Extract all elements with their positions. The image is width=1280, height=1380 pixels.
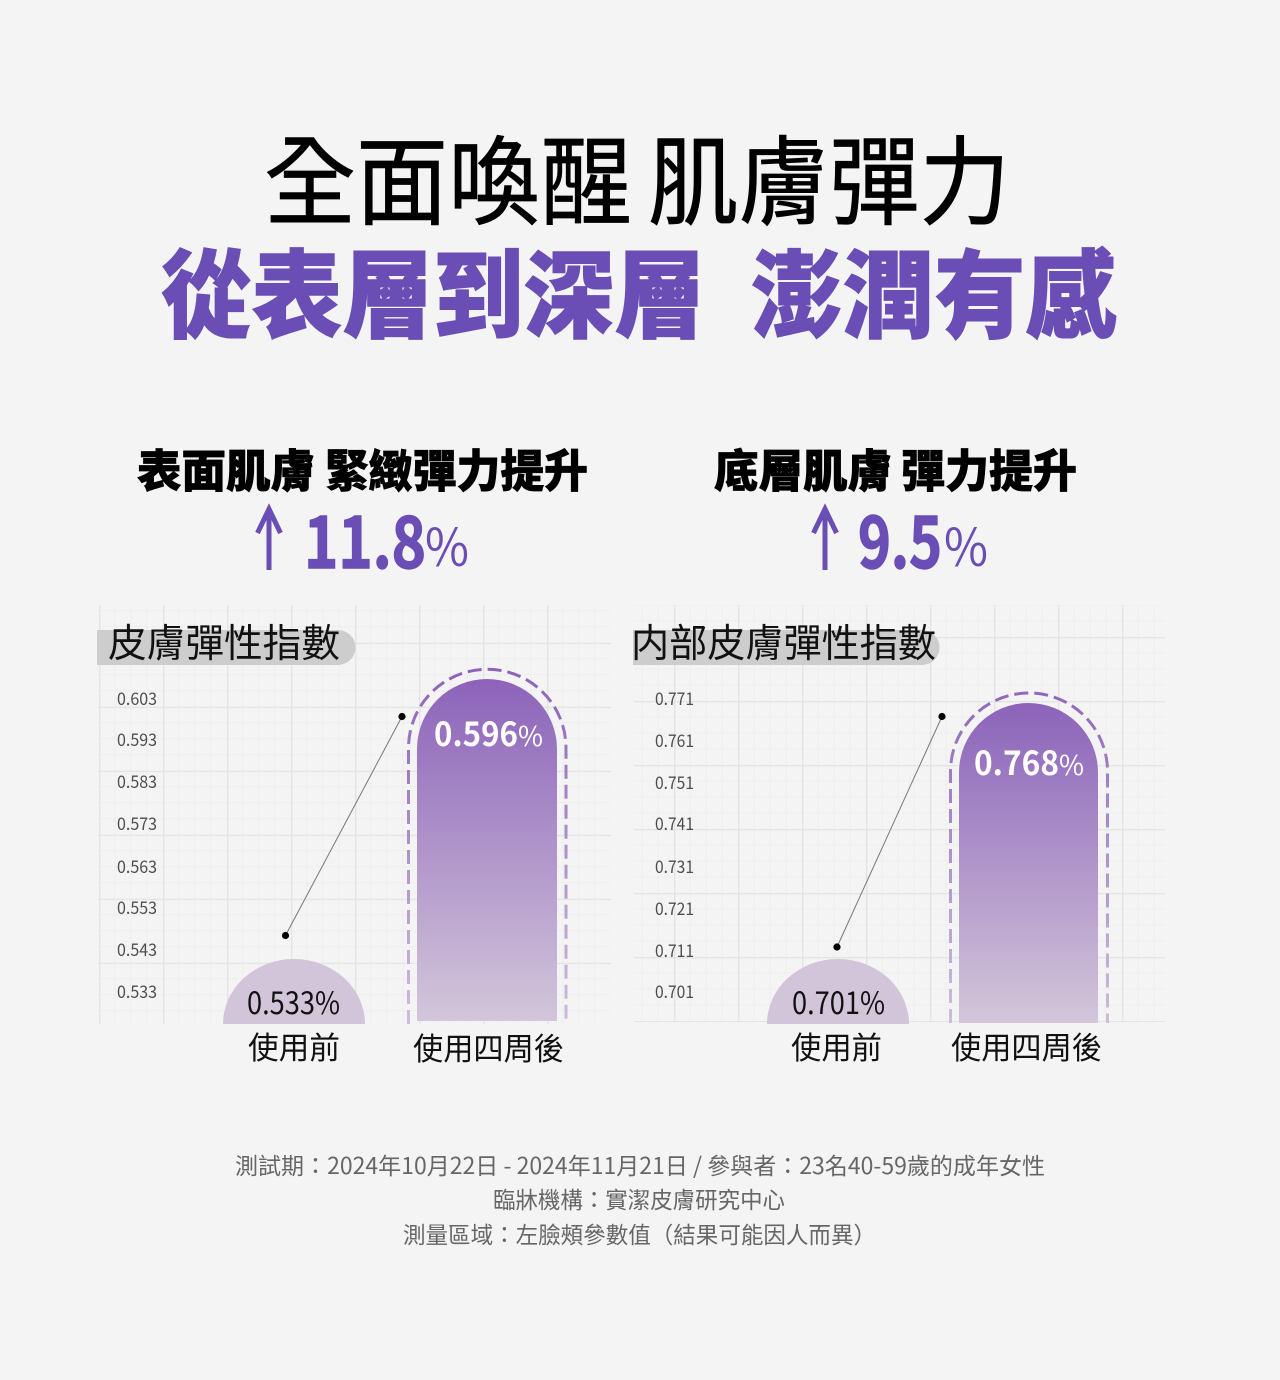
x axis labels: 使用前 — [248, 1023, 340, 1068]
y axis labels: 0.761 — [655, 727, 694, 752]
y axis labels: 0.543 — [117, 936, 157, 961]
bar: before use: 0.533% — [247, 978, 340, 1023]
bar: after four weeks: % — [518, 715, 543, 754]
connector line — [282, 713, 406, 939]
connector line — [833, 713, 946, 951]
stat: up 9.5% — [814, 488, 988, 589]
x axis labels: 使用四周後 — [951, 1023, 1102, 1068]
y axis labels: 0.731 — [655, 853, 694, 878]
title — [161, 104, 1117, 358]
bar: after four weeks: % — [1059, 744, 1084, 783]
y axis labels: 0.583 — [117, 768, 157, 793]
bar: before use — [767, 959, 909, 1024]
bar: after four weeks: 0.596 — [434, 708, 518, 756]
y axis labels: 0.553 — [117, 894, 157, 919]
stat: up 9.5%: % — [944, 506, 988, 581]
heading: surface skin: 表面肌膚 — [137, 435, 315, 500]
title: 澎潤有感 — [751, 219, 1117, 358]
y axis labels: 0.573 — [117, 810, 157, 835]
y axis labels — [117, 685, 157, 1003]
y axis labels: 0.751 — [655, 769, 694, 794]
chart label: skin elasticity index: 皮膚彈性指數 — [108, 613, 340, 669]
y axis labels: 0.563 — [117, 853, 157, 878]
title: 全面喚醒 — [264, 104, 632, 245]
title: 肌膚彈力 — [648, 104, 1010, 245]
stat: up 9.5%: 9.5 — [858, 488, 942, 589]
bar: after four weeks: 0.768 — [974, 737, 1059, 785]
heading: deep skin: 底層肌膚 — [714, 435, 892, 500]
y axis labels: 0.533 — [117, 978, 157, 1003]
stat: up 11.8%: 11.8 — [304, 488, 426, 589]
footnote — [235, 1147, 1045, 1250]
y axis labels: 0.741 — [655, 810, 694, 835]
panel: skin elasticity index chart — [97, 605, 611, 1069]
stat: up 11.8%: % — [425, 506, 469, 581]
footnote: 測試期：2024年10月22日 - 2024年11月21日 / 參與者：23名40-59歲的成年女性 — [235, 1147, 1045, 1181]
y axis labels: 0.721 — [655, 895, 694, 920]
heading: surface skin: 緊緻彈力提升 — [325, 435, 588, 500]
bar: after four weeks — [408, 669, 566, 1024]
y axis labels: 0.603 — [117, 685, 157, 710]
chart label: inner skin elasticity index: 内部皮膚彈性指數 — [631, 613, 936, 669]
heading: deep skin — [714, 435, 1077, 500]
y axis labels — [655, 685, 694, 1003]
bar: before use — [223, 959, 365, 1024]
x axis labels — [248, 1023, 564, 1069]
stat: up 11.8% — [258, 488, 469, 589]
footnote: 臨牀機構：實潔皮膚研究中心 — [493, 1181, 785, 1215]
heading: surface skin — [137, 435, 588, 500]
x axis labels — [791, 1023, 1102, 1068]
panel: inner skin elasticity index chart — [631, 605, 1165, 1068]
x axis labels: 使用前 — [791, 1023, 882, 1068]
bar: after four weeks — [950, 693, 1108, 1023]
bar: before use: 0.701% — [792, 978, 885, 1023]
x axis labels: 使用四周後 — [413, 1024, 564, 1069]
heading: deep skin: 彈力提升 — [901, 435, 1077, 500]
y axis labels: 0.711 — [655, 937, 694, 962]
footnote: 測量區域：左臉頰參數值（結果可能因人而異） — [403, 1216, 876, 1250]
y axis labels: 0.593 — [117, 726, 157, 751]
y axis labels: 0.771 — [655, 685, 694, 710]
title: 從表層到深層 — [161, 219, 705, 358]
y axis labels: 0.701 — [655, 978, 694, 1003]
